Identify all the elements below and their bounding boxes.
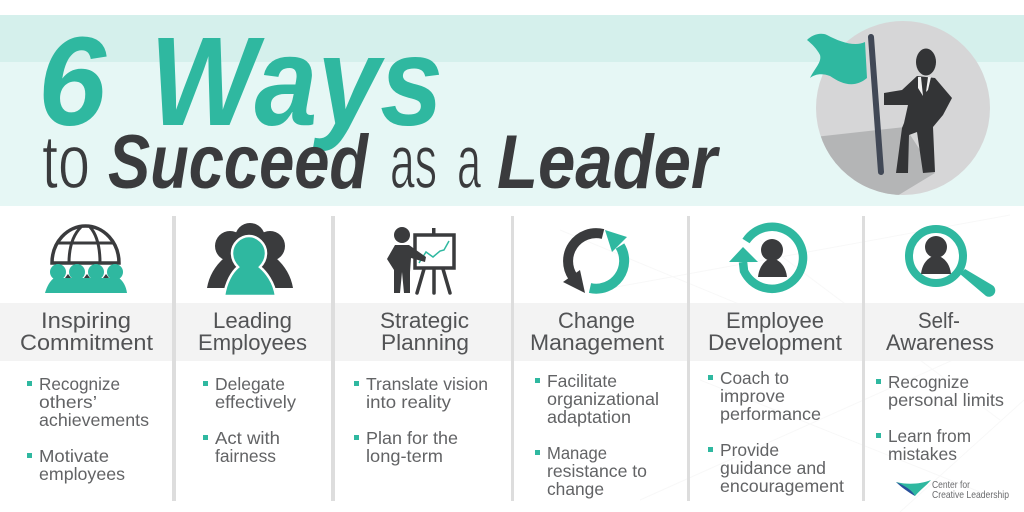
bullet list: fairness	[215, 446, 276, 466]
title: to Succeed as a Leader: Leader	[497, 120, 721, 205]
bullet list: resistance to	[547, 461, 647, 481]
icon: cycle arrows	[563, 230, 627, 293]
bullet list: Manage	[547, 443, 607, 463]
bullet list: employees	[39, 464, 125, 484]
logo: Center for Creative Leadership	[896, 479, 1009, 501]
title: 6 Ways: 6	[38, 11, 107, 152]
heading	[380, 308, 469, 355]
heading	[530, 308, 664, 355]
bullet list: adaptation	[547, 407, 631, 427]
bullet list: encouragement	[720, 476, 844, 496]
heading: Strategic	[380, 308, 469, 333]
bullet list: guidance and	[720, 458, 826, 478]
heading: Management	[530, 330, 664, 355]
title: 6 Ways	[38, 11, 443, 152]
title: to Succeed as a Leader	[42, 120, 721, 205]
bullet list	[535, 371, 659, 499]
heading	[20, 308, 153, 355]
bullet list: performance	[720, 404, 821, 424]
column: Self-Awareness	[876, 229, 1004, 464]
bullet list	[354, 374, 488, 466]
title: to Succeed as a Leader: as	[390, 120, 437, 205]
heading: Self-	[918, 308, 960, 333]
heading	[886, 308, 994, 355]
bullet list: Recognize	[888, 372, 969, 392]
icon: group of people	[207, 223, 293, 296]
bullet list: effectively	[215, 392, 296, 412]
bullet list: personal limits	[888, 390, 1004, 410]
column: Change Management	[530, 230, 664, 499]
bullet list: Act with	[215, 428, 280, 448]
heading: Development	[708, 330, 842, 355]
bullet list: change	[547, 479, 604, 499]
logo: Center for Creative Leadership: Center for	[932, 479, 970, 491]
bullet list: Motivate	[39, 446, 109, 466]
heading	[708, 308, 842, 355]
bullet list: mistakes	[888, 444, 957, 464]
bullet list: Coach to	[720, 368, 789, 388]
heading	[198, 308, 307, 355]
column band	[0, 303, 1024, 361]
bullet list	[203, 374, 296, 466]
bullet list: Recognize	[39, 374, 120, 394]
icon: person in cycle arrow	[729, 227, 803, 289]
bullet list	[27, 374, 149, 484]
title: to Succeed as a Leader: a	[457, 120, 481, 205]
bullet list: long-term	[366, 446, 443, 466]
heading: Employees	[198, 330, 307, 355]
bullet list: Delegate	[215, 374, 285, 394]
column dividers	[172, 216, 865, 501]
bullet list: Translate vision	[366, 374, 488, 394]
bullet list: into reality	[366, 392, 451, 412]
icon: globe and people	[45, 226, 127, 293]
heading: Commitment	[20, 330, 153, 355]
title: to Succeed as a Leader: Succeed	[108, 120, 369, 205]
bullet list: others’	[39, 392, 97, 412]
column: Employee Development	[708, 227, 844, 496]
heading: Awareness	[886, 330, 994, 355]
heading: Planning	[381, 330, 469, 355]
heading: Change	[558, 308, 635, 333]
title: 6 Ways: Ways	[150, 11, 443, 152]
logo: Center for Creative Leadership: Creative Leadership	[932, 489, 1009, 501]
title: to Succeed as a Leader: to	[42, 120, 90, 205]
column: Leading Employees	[198, 223, 307, 466]
icon: presenter at chart	[387, 227, 454, 293]
bullet list: Facilitate	[547, 371, 617, 391]
bullet list: Provide	[720, 440, 779, 460]
icon: person under magnifier	[909, 229, 995, 297]
header banner	[0, 15, 1024, 206]
heading: Inspiring	[41, 308, 131, 333]
bullet list: Plan for the	[366, 428, 458, 448]
bullet list	[708, 368, 844, 496]
column: Inspiring Commitment	[20, 226, 153, 484]
heading: Leading	[213, 308, 292, 333]
bullet list: achievements	[39, 410, 149, 430]
bullet list	[876, 372, 1004, 464]
column: Strategic Planning	[354, 227, 488, 466]
bullet list: improve	[720, 386, 785, 406]
heading: Employee	[726, 308, 824, 333]
bullet list: organizational	[547, 389, 659, 409]
icon: leader with flag	[807, 21, 990, 196]
bullet list: Learn from	[888, 426, 971, 446]
